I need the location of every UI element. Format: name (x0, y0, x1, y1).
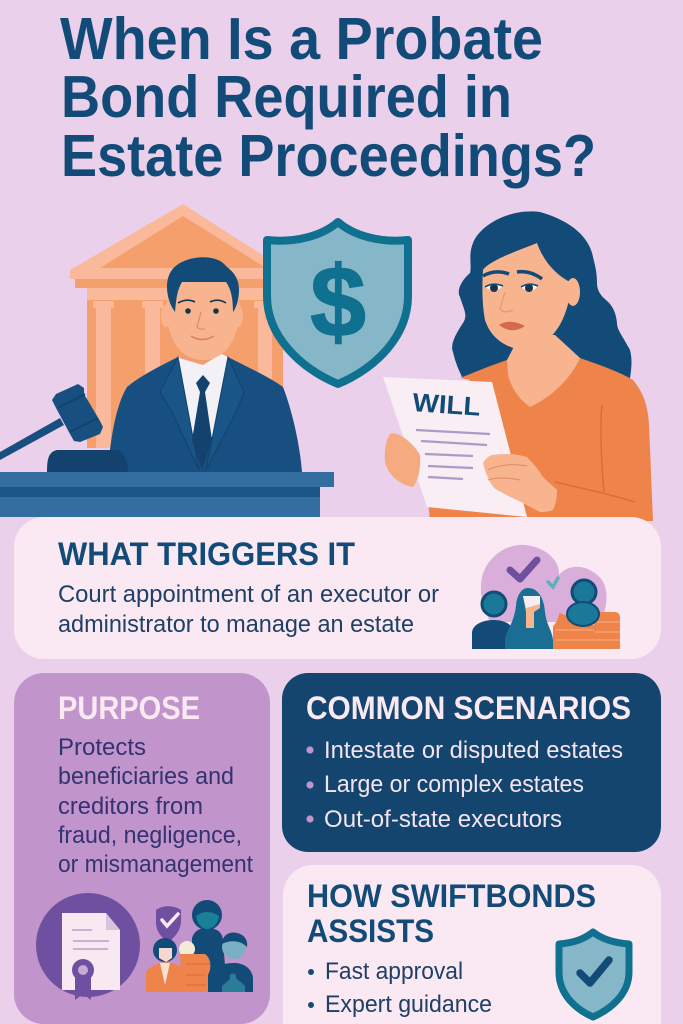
panel: what triggers it (14, 517, 661, 659)
text block: beneficiaries and (58, 763, 234, 790)
text block (58, 581, 439, 638)
text block: fraud, negligence, (58, 822, 242, 849)
text block: administrator to manage an estate (58, 611, 414, 638)
icon: check shield (559, 932, 629, 1017)
illustration: will document and hands: WILL (412, 387, 482, 422)
list: Out-of-state executors (324, 806, 562, 833)
icon: dollar shield (267, 222, 408, 384)
text block: Court appointment of an executor or (58, 581, 439, 608)
icon: gavel (0, 384, 128, 472)
icon: certificate document (36, 893, 140, 1000)
title: Bond Required in (61, 64, 512, 130)
heading: WHAT TRIGGERS IT (58, 536, 355, 572)
text block: creditors from (58, 793, 203, 820)
list: Expert guidance (325, 991, 492, 1018)
title: When Is a Probate (60, 6, 543, 72)
heading: COMMON SCENARIOS (306, 690, 631, 726)
heading: HOW SWIFTBONDS (307, 878, 596, 914)
list: Intestate or disputed estates (324, 737, 623, 764)
illustration: judge bench (0, 472, 334, 517)
illustration: courthouse (70, 204, 285, 448)
list (306, 737, 623, 833)
text block: Protects (58, 734, 146, 761)
text block (58, 734, 253, 878)
list: Large or complex estates (324, 771, 584, 798)
illustration: will document and hands (383, 377, 557, 517)
heading: PURPOSE (58, 690, 200, 726)
panel: purpose (14, 673, 270, 1024)
panel: how swiftbonds assists (283, 865, 661, 1024)
heading (307, 878, 596, 949)
list: Fast approval (325, 958, 463, 985)
list (308, 958, 492, 1018)
icon: beneficiaries group (146, 900, 253, 992)
title (60, 6, 596, 189)
heading: ASSISTS (307, 913, 434, 949)
text block: or mismanagement (58, 851, 253, 878)
illustration: judge (108, 257, 302, 472)
illustration: worried woman holding will (427, 211, 653, 521)
icon: dollar shield: $ (310, 246, 366, 358)
title: Estate Proceedings? (61, 123, 596, 189)
panel: common scenarios (282, 673, 661, 852)
icon: group with checkmarks and coins (472, 545, 620, 649)
